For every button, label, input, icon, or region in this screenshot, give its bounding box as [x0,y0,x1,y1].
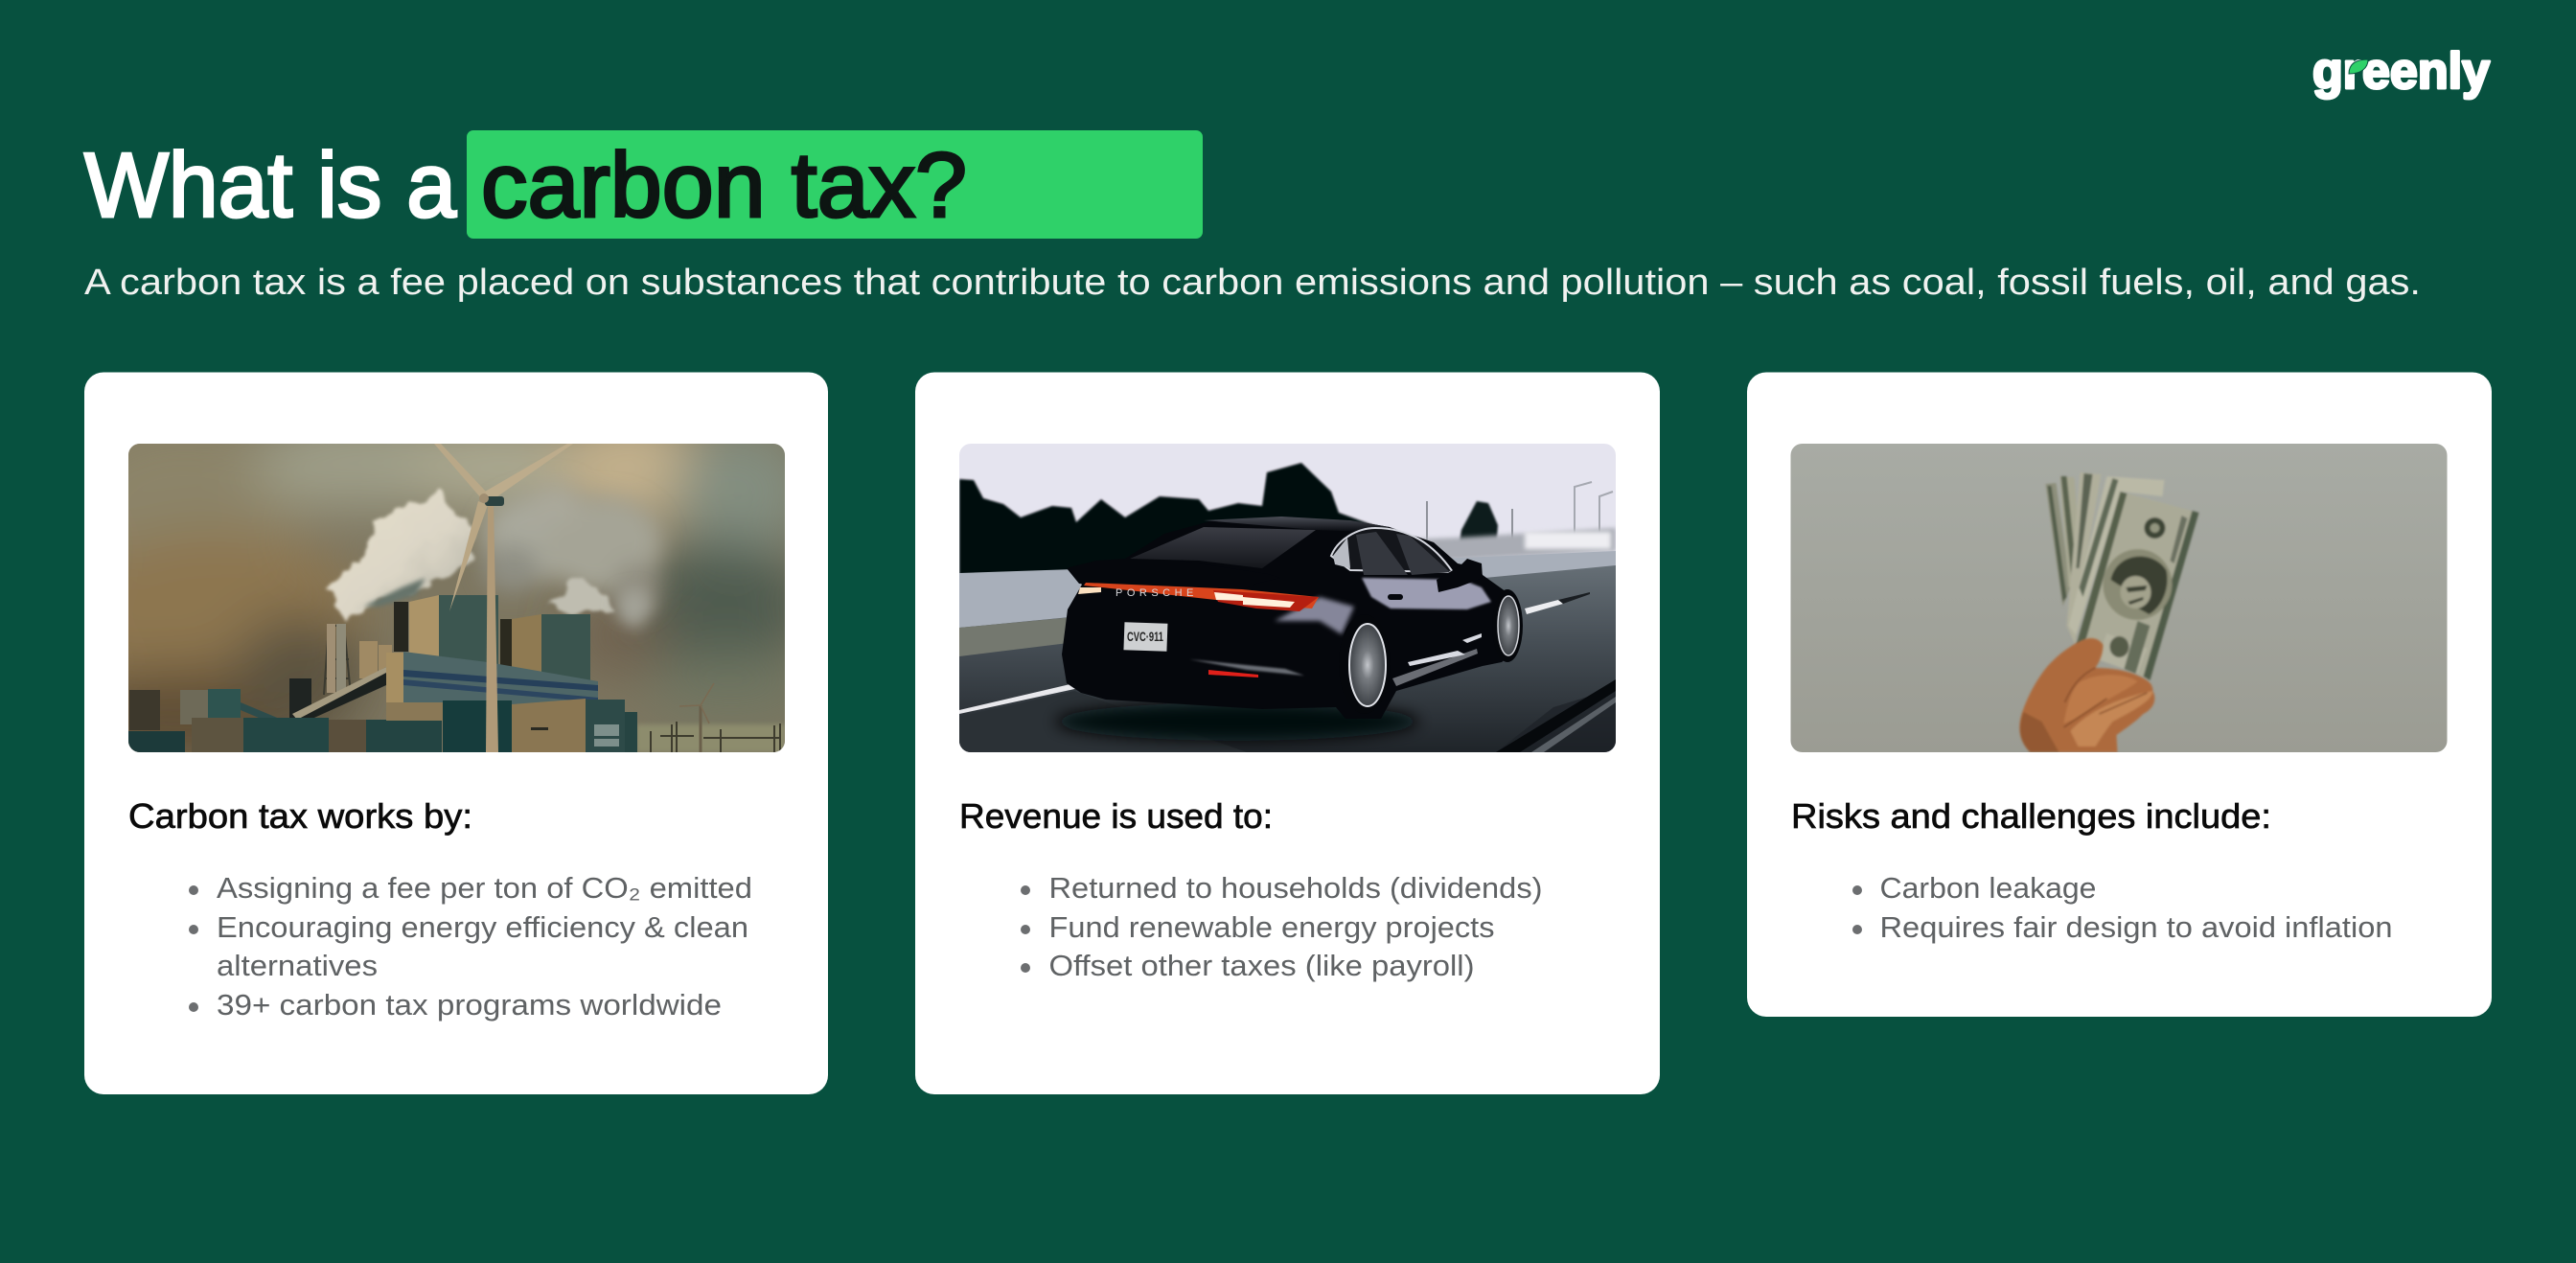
subtitle: A carbon tax is a fee placed on substances that contribute to carbon emissions and pollution – such as coal, fossil fuels, oil, and gas. [84,263,2421,303]
bullet list: revenue: Returned to households (dividends) [1048,871,1543,905]
rear window [1130,527,1316,568]
bullet list: risks: Carbon leakage [1880,871,2097,905]
taillights [1084,583,1319,609]
bullet list: risks [1852,871,2392,944]
wheels [1344,623,1351,636]
bullet list: works by [189,871,752,1022]
door highlights [1362,578,1491,609]
heading: revenue is used to: Revenue is used to: [959,796,1273,836]
distant turbine and pylons [651,683,780,752]
side windows [1331,528,1453,572]
title: carbon tax? [481,134,967,237]
bullet list: revenue: Fund renewable energy projects [1048,910,1495,944]
bullet list: risks: Requires fair design to avoid inflation [1880,910,2392,944]
road [959,565,1616,752]
grey smoke behind turbine [483,484,662,612]
bullet list: works by: Assigning a fee per ton of CO₂ emitted [217,871,752,905]
bullet list: revenue: Offset other taxes (like payroll) [1048,949,1474,982]
bullet list: works by: Encouraging energy efficiency & clean [217,910,748,944]
photo: black sports car on highway [959,444,1616,752]
panel: risks and challenges [1747,372,2492,1017]
photo: power plant and wind turbine [128,444,785,752]
bullet list: revenue [1021,871,1543,982]
bullet list: works by: alternatives [217,949,378,982]
small smoke puff [543,583,612,614]
title highlight box [467,130,1203,239]
title [84,130,1203,239]
panel: revenue is used to [915,372,1660,1094]
main smoke plume [325,494,472,618]
heading: risks and challenges: Risks and challenges include: [1791,796,2271,836]
wind turbine [486,501,498,752]
badge and license plate: PORSCHE [1116,587,1198,599]
photo: black sports car on highway: CVC·911 [1127,629,1163,644]
title: What is a [84,134,457,237]
panel: carbon tax works by [52,372,828,1094]
barrier [959,551,1616,631]
photo: hand holding dollar bills [1790,444,2448,752]
bullet list: works by: 39+ carbon tax programs worldwide [217,988,722,1022]
logo: greenly: greenly [2312,43,2491,100]
car body [1062,517,1520,719]
heading: carbon tax works by: Carbon tax works by: [128,796,472,836]
buildings [324,626,351,695]
tree line [959,462,1376,573]
dollar bills [2045,472,2198,680]
hand [2019,638,2154,752]
